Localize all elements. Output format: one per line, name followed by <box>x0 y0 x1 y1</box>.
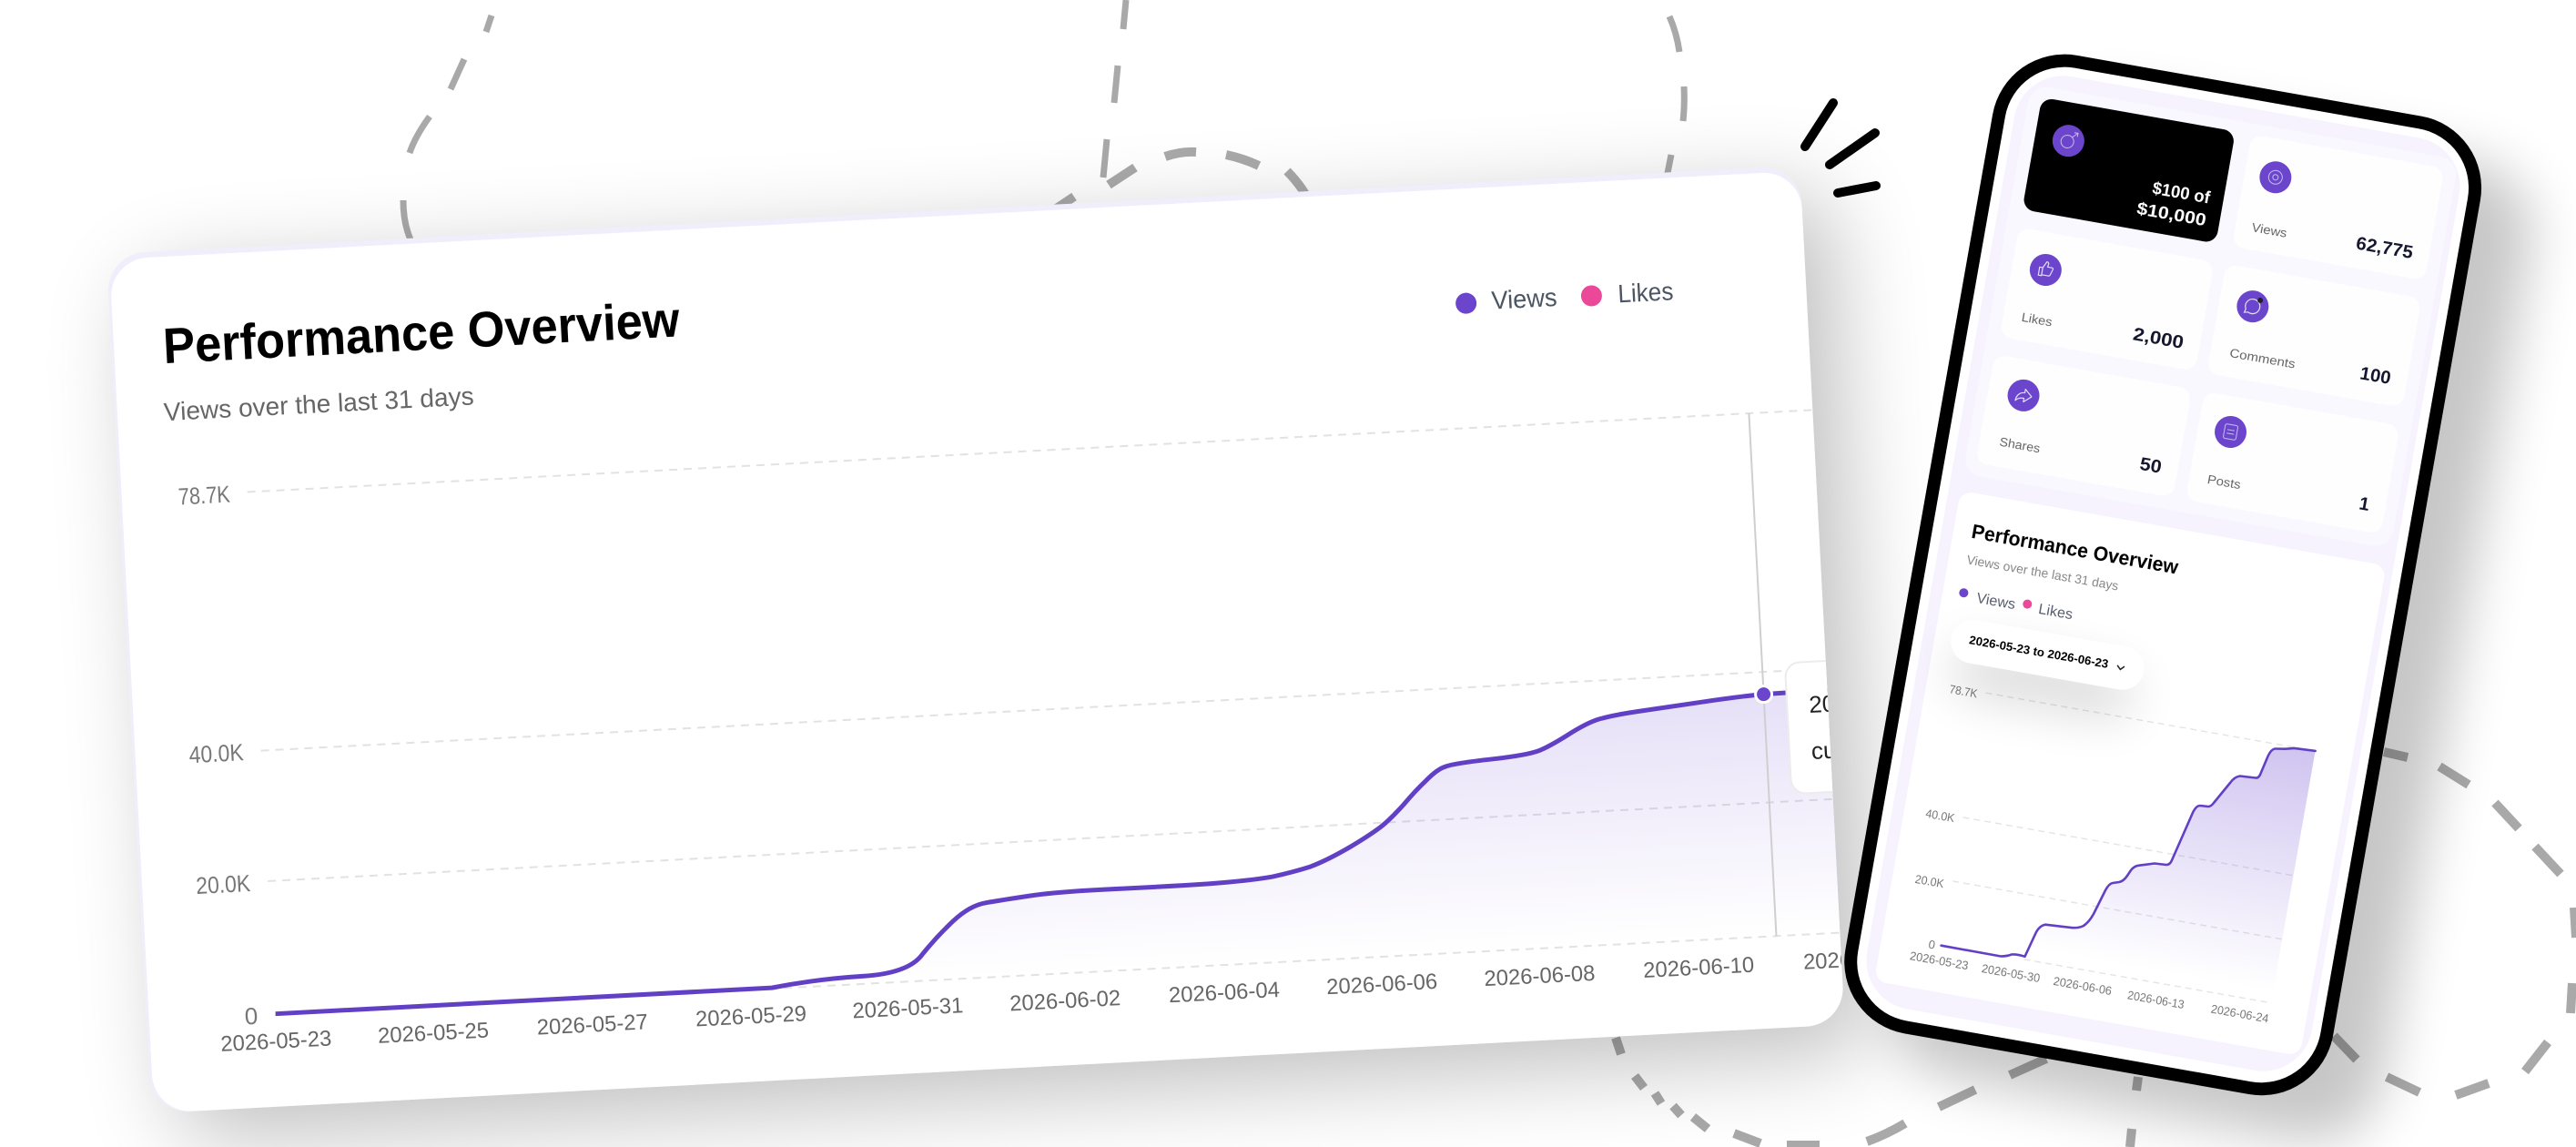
phone x axis labels: 2026-05-30 <box>1981 961 2041 985</box>
legend <box>1455 282 1673 314</box>
y axis labels: 40.0K <box>188 738 245 768</box>
x axis labels: 2026-06-06 <box>1326 969 1438 1000</box>
date range pill <box>1942 616 2147 720</box>
y axis labels: 78.7K <box>177 481 231 510</box>
stat card: comments: Comments <box>2228 346 2297 371</box>
stat card: likes <box>2000 228 2215 371</box>
legend: Likes <box>1618 277 1674 308</box>
views line <box>263 690 1840 1014</box>
panel: phone performance overview <box>1874 491 2387 1056</box>
phone x axis labels <box>1909 949 2270 1026</box>
stat card: earnings <box>2023 97 2236 244</box>
stat card: posts: 1 <box>2358 493 2371 515</box>
phone chart area <box>1942 748 2316 992</box>
x axis labels: 2026-06-08 <box>1484 961 1596 991</box>
phone y axis labels: 20.0K <box>1914 872 1945 890</box>
stat card: views: 62,775 <box>2355 233 2415 263</box>
x axis labels: 2026-05-25 <box>377 1018 490 1049</box>
phone heading: Performance Overview <box>1970 520 2181 579</box>
stat card: earnings: $10,000 <box>2135 199 2207 230</box>
y axis labels: 20.0K <box>195 869 251 899</box>
tooltip: 2026-06-11 <box>1808 685 1929 718</box>
area under views line <box>965 695 1837 916</box>
x axis labels: 2026-05-29 <box>695 1001 807 1032</box>
phone y axis labels <box>1902 682 1981 952</box>
phone shadow <box>1883 88 2543 1147</box>
phone x axis labels: 2026-06-06 <box>2053 974 2113 998</box>
card shadow <box>135 191 1873 1139</box>
x axis labels: 2026-06-10 <box>1643 953 1755 983</box>
tooltip <box>1784 660 1833 794</box>
x axis labels <box>221 952 1842 1051</box>
panel: phone mockup <box>1833 43 2493 1107</box>
y axis labels <box>175 481 259 1032</box>
stat card: views <box>2232 135 2444 280</box>
tooltip: cumulative <box>1810 732 1925 765</box>
phone frame <box>1833 43 2493 1107</box>
stat card: posts <box>2186 391 2400 534</box>
stat card: likes: 2,000 <box>2132 324 2186 353</box>
y axis labels: 0 <box>244 1002 259 1030</box>
phone x axis labels: 2026-05-23 <box>1909 949 1970 972</box>
stat card: comments <box>2206 264 2421 408</box>
stat card: shares <box>1975 354 2192 498</box>
legend: Views <box>1491 283 1557 315</box>
stat card: likes: Likes <box>2021 310 2054 330</box>
stat card: shares: 50 <box>2138 454 2163 478</box>
icon: attention sparks <box>1805 103 1876 193</box>
phone y axis labels: 40.0K <box>1924 807 1956 825</box>
hover guide line <box>1749 413 1776 936</box>
phone x axis labels: 2026-06-24 <box>2210 1002 2270 1025</box>
x axis labels: 2026-06-04 <box>1168 978 1281 1008</box>
x axis labels: 2026-05-27 <box>536 1010 648 1040</box>
x axis labels: 2026-06-12 <box>1802 944 1915 975</box>
date range pill: 2026-05-23 to 2026-06-23 <box>1968 633 2110 671</box>
stat card: shares: Shares <box>1999 435 2042 455</box>
x axis labels: 2026-05-31 <box>852 993 964 1023</box>
hover point <box>1755 685 1772 703</box>
phone legend: Likes <box>2037 602 2074 623</box>
phone legend: Views <box>1975 591 2016 613</box>
stat card: posts: Posts <box>2206 472 2242 492</box>
stat card: views: Views <box>2251 220 2288 240</box>
phone subtitle: Views over the last 31 days <box>1965 552 2120 594</box>
phone legend <box>1957 587 2074 623</box>
stat card: comments: 100 <box>2358 363 2392 389</box>
phone y axis labels: 0 <box>1928 938 1936 952</box>
phone y axis labels: 78.7K <box>1949 682 1979 700</box>
stat card: earnings: $100 of <box>2151 179 2212 208</box>
panel: performance overview card <box>106 158 1985 1113</box>
phone chart line <box>1942 748 2316 957</box>
x axis labels: 2026-06-02 <box>1009 986 1121 1016</box>
chart: views over time <box>178 410 1842 1051</box>
subtitle: Views over the last 31 days <box>163 381 474 426</box>
phone chart grid <box>1941 693 2316 1003</box>
x axis labels: 2026-05-23 <box>220 1027 332 1057</box>
heading: performance overview: Performance Overview <box>162 290 681 374</box>
phone x axis labels: 2026-06-13 <box>2126 988 2186 1011</box>
